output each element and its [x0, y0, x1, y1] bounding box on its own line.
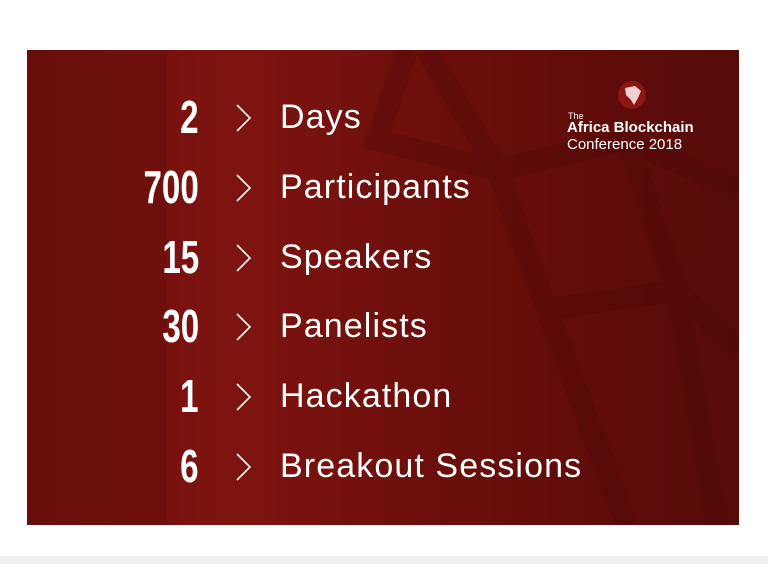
row: days: Days [280, 98, 362, 136]
row: hackathon: 1 [181, 370, 199, 422]
row: speakers: Speakers [280, 238, 432, 276]
row: speakers: 15 [162, 231, 199, 283]
row: breakout: Breakout Sessions [280, 447, 582, 485]
stat rows [144, 91, 582, 492]
row: days [181, 91, 362, 143]
decorative lattice [363, 50, 552, 322]
row: days: 2 [181, 91, 199, 143]
row: hackathon: Hackathon [280, 377, 452, 415]
row: hackathon [181, 370, 452, 422]
icon: africa [618, 81, 646, 109]
row: panelists: 30 [162, 300, 199, 352]
row: participants: 700 [144, 161, 199, 213]
logo [567, 81, 694, 153]
logo: Conference 2018 [567, 136, 682, 153]
logo: The [568, 111, 584, 121]
row: breakout: 6 [181, 440, 199, 492]
row: participants [144, 161, 471, 213]
logo: Africa Blockchain [567, 119, 694, 136]
row: panelists [162, 300, 428, 352]
row: breakout [181, 440, 582, 492]
row: participants: Participants [280, 168, 471, 206]
row: speakers [162, 231, 432, 283]
panel: background [27, 50, 739, 525]
row: panelists: Panelists [280, 307, 428, 345]
